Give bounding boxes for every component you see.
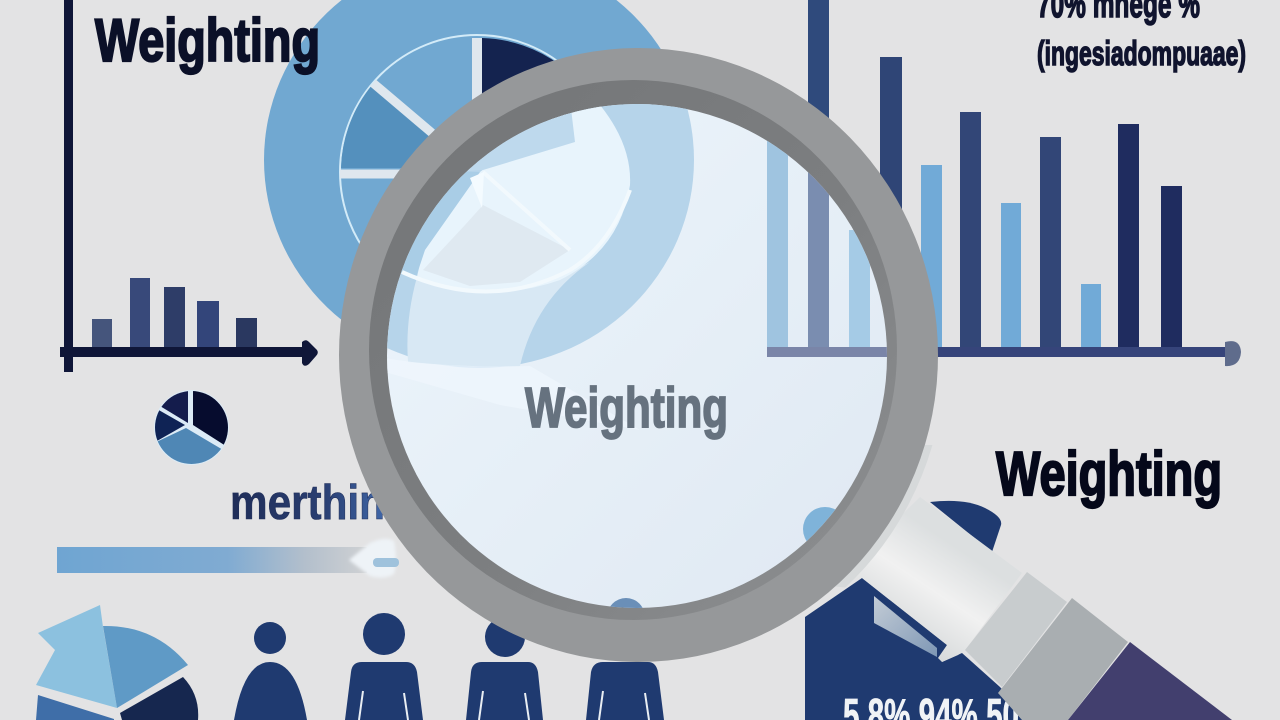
magnified circle bbox=[387, 104, 694, 368]
marker: diamond bbox=[349, 539, 396, 578]
lens heading: Weighting bbox=[525, 376, 728, 440]
magnified blue dot bbox=[803, 507, 836, 541]
people icons bbox=[234, 613, 664, 720]
left bar chart bbox=[60, 0, 318, 372]
icon: small pie bbox=[154, 390, 229, 465]
magnified pie bbox=[395, 100, 630, 292]
magnifying glass lens bbox=[387, 104, 887, 608]
magnified person head bbox=[610, 598, 643, 608]
handle: grip bbox=[1068, 642, 1232, 720]
pie chart behind lens bbox=[340, 35, 614, 309]
slice: navy left bbox=[155, 410, 185, 441]
person 3 bbox=[466, 617, 543, 720]
pie base bbox=[417, 100, 630, 292]
pie dividers bbox=[340, 38, 477, 174]
wedge: light blue bbox=[470, 113, 575, 170]
wedge: pale grey bbox=[423, 205, 570, 286]
pie outline bbox=[340, 35, 614, 309]
magnifying glass ring bbox=[331, 42, 945, 670]
pie chart: bottom left bbox=[36, 605, 198, 720]
slice: dark top left bbox=[162, 391, 188, 423]
person 1 bbox=[234, 622, 307, 720]
large blue circle bbox=[264, 0, 694, 368]
lens highlight bbox=[387, 358, 504, 373]
slice: mid blue bbox=[103, 626, 188, 708]
magnifying glass handle bbox=[832, 497, 1232, 720]
heading: top left: Weighting bbox=[95, 7, 320, 74]
slice: navy bbox=[120, 677, 198, 720]
marker: pill bbox=[373, 558, 399, 567]
spoke highlight bbox=[470, 172, 484, 208]
ring: outer bbox=[339, 48, 938, 662]
slice: blue bottom bbox=[158, 428, 221, 464]
gradient progress bar bbox=[57, 539, 399, 578]
handle: collar dark bbox=[998, 598, 1128, 720]
slice: steel blue bbox=[36, 695, 114, 720]
handle: collar light bbox=[965, 572, 1067, 687]
pie arc bbox=[402, 190, 630, 292]
slice: light blue bbox=[36, 605, 117, 708]
person 2 bbox=[345, 613, 423, 720]
shape: lower body bbox=[805, 578, 1030, 720]
bars: left chart bbox=[92, 278, 257, 349]
wedge: left blue bbox=[395, 170, 480, 280]
pie slice: mid blue bbox=[341, 85, 440, 168]
spoke bbox=[483, 172, 570, 250]
slice: dark right bbox=[193, 391, 228, 445]
lens background bbox=[380, 100, 900, 615]
person 4 bbox=[586, 662, 664, 720]
label: merthin: merthin bbox=[230, 476, 385, 530]
navy shape behind handle bbox=[805, 501, 1030, 720]
right bar chart bbox=[808, 0, 1241, 366]
magnified swoosh bbox=[407, 262, 590, 366]
pie slice: navy bbox=[482, 38, 560, 120]
ring: light outer edge bbox=[836, 445, 932, 588]
arrowhead: right chart bbox=[1225, 341, 1241, 366]
bars: right chart bbox=[808, 0, 1182, 354]
magnified bars bbox=[767, 140, 887, 357]
ring: inner shade bbox=[369, 80, 897, 620]
handle: white neck bbox=[832, 497, 1022, 662]
shape: upper cap bbox=[930, 501, 1001, 552]
axis: right chart bbox=[900, 347, 1225, 357]
axes: left chart bbox=[60, 0, 318, 372]
facet: light triangle bbox=[874, 596, 937, 657]
text: top right bbox=[1037, 0, 1246, 73]
